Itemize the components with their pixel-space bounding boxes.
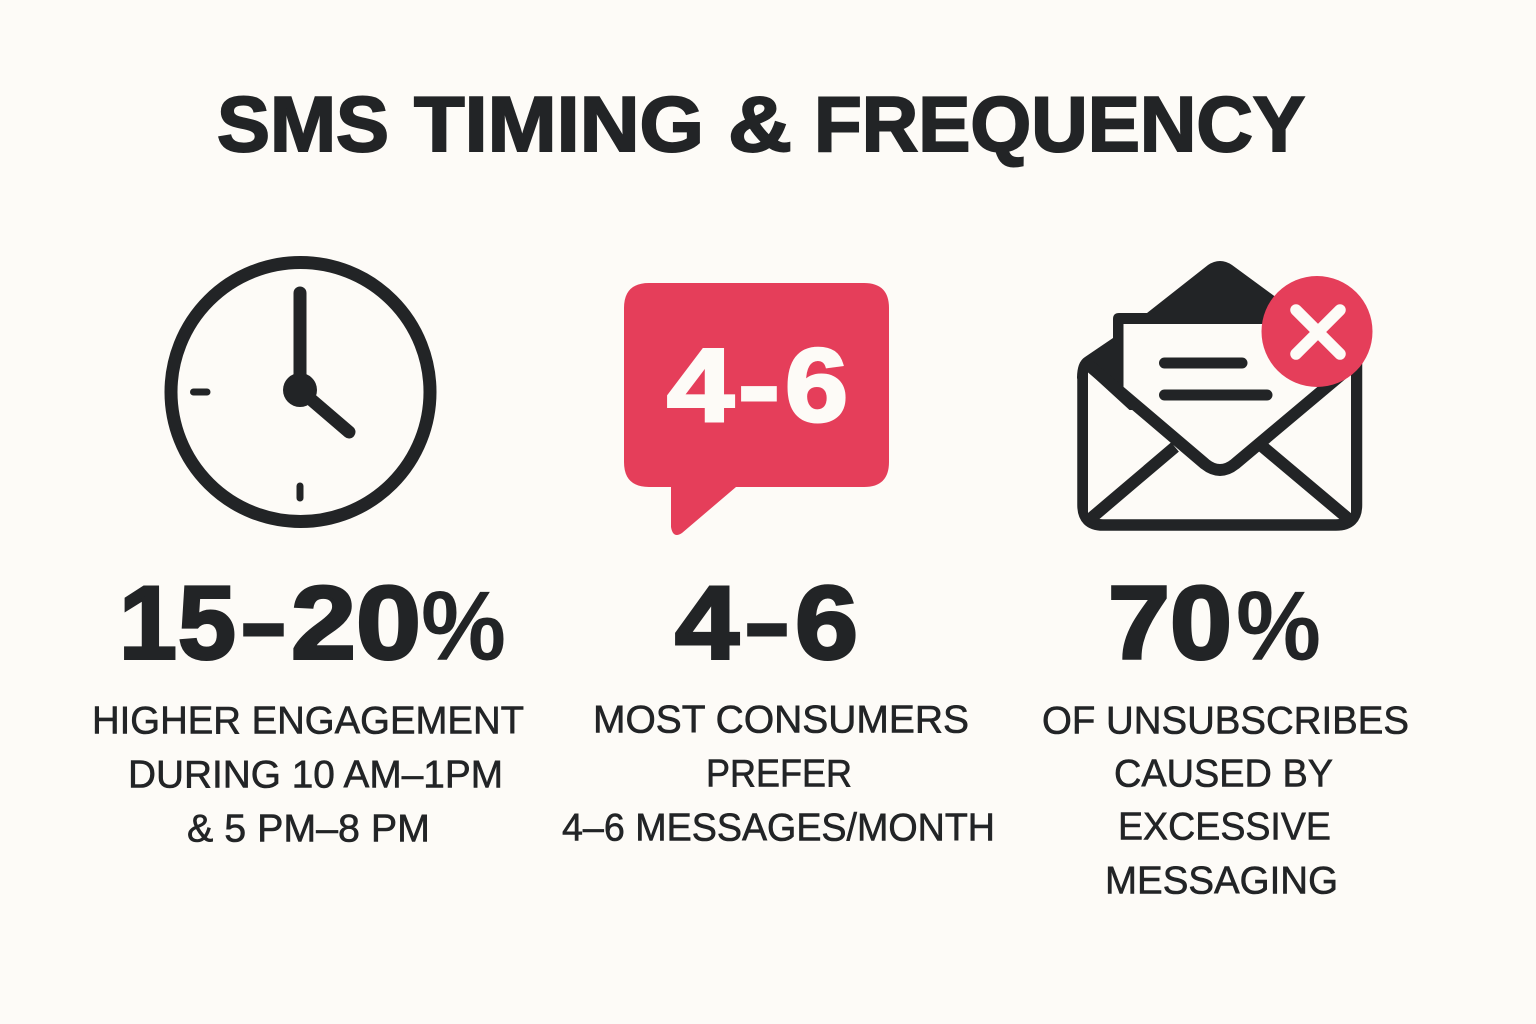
icon: speech bubble with 4-6: [624, 283, 889, 535]
title: FREQUENCY: [814, 80, 1305, 168]
stat: 15–20%: 15: [119, 566, 236, 682]
description: engagement: [92, 700, 524, 850]
stat: 4–6: 6: [795, 566, 858, 682]
description: engagement: DURING 10 AM–1PM: [128, 754, 503, 796]
title: [217, 80, 1305, 168]
stat: 70%: 70: [1108, 566, 1232, 682]
description: unsubscribes: EXCESSIVE: [1118, 806, 1331, 848]
description: unsubscribes: OF UNSUBSCRIBES: [1042, 700, 1409, 742]
title: TIMING: [414, 80, 704, 168]
stat: 70%: %: [1236, 570, 1321, 680]
panel: unsubscribes: [1042, 261, 1409, 902]
panel: message preference: [562, 283, 995, 850]
description: unsubscribes: MESSAGING: [1105, 860, 1338, 902]
icon: speech bubble with 4-6: 4: [667, 328, 734, 444]
stat: 70%: [1108, 566, 1321, 682]
description: preference: 4–6 MESSAGES/MONTH: [562, 806, 995, 850]
icon: speech bubble with 4-6: 6: [785, 328, 848, 444]
stat: 4–6: –: [746, 565, 788, 681]
stat: 15–20%: 20: [291, 566, 421, 682]
icon: open envelope with red x badge: [1077, 261, 1372, 525]
red x badge: [1262, 276, 1372, 387]
description: preference: MOST CONSUMERS: [593, 698, 969, 742]
letter sheet: [1124, 324, 1345, 470]
panel: engagement timing: [92, 262, 524, 850]
description: preference: PREFER: [706, 752, 852, 796]
description: engagement: HIGHER ENGAGEMENT: [92, 700, 524, 742]
icon: speech bubble with 4-6: -: [738, 328, 780, 444]
icon: clock: [171, 262, 430, 522]
description: unsubscribes: [1042, 700, 1409, 902]
title: SMS: [217, 80, 389, 168]
envelope flap and letter outline: [1077, 261, 1330, 410]
stat: 15–20%: –: [242, 565, 285, 681]
title: &: [728, 80, 792, 168]
stat: 15–20%: [119, 565, 506, 682]
stat: 4–6: [675, 565, 858, 682]
envelope body: [1083, 362, 1356, 525]
stat: 15–20%: %: [421, 570, 506, 680]
description: unsubscribes: CAUSED BY: [1114, 752, 1333, 796]
envelope side panels: [1088, 372, 1170, 516]
description: preference: [562, 698, 995, 850]
description: engagement: & 5 PM–8 PM: [187, 808, 430, 850]
envelope fold lines: [1085, 362, 1354, 521]
stat: 4–6: 4: [675, 566, 739, 682]
letter text lines: [1164, 363, 1267, 395]
